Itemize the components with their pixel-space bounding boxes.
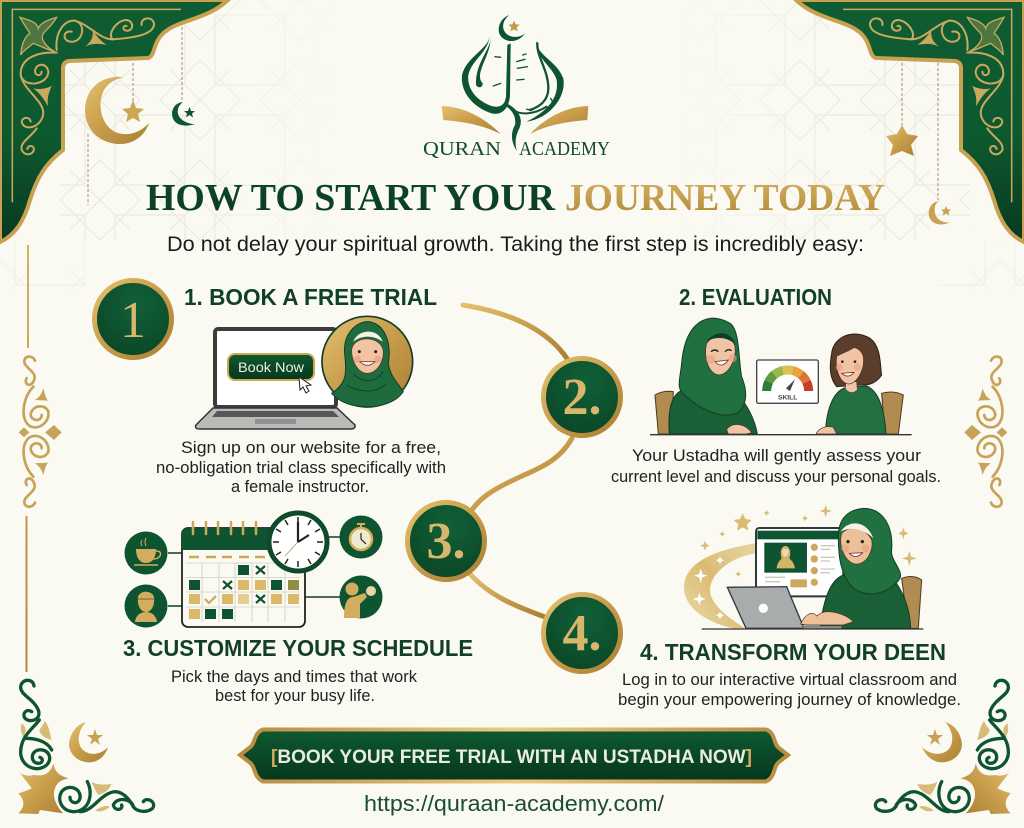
logo wordmark: ACADEMY	[519, 138, 610, 160]
bottom right corner ornament	[875, 680, 1011, 814]
title	[146, 177, 885, 219]
logo: Quran Academy	[423, 15, 610, 160]
icon: person with glasses	[124, 584, 168, 628]
description: step 4: Log in to our interactive virtual classroom and	[622, 671, 957, 689]
illustration: calendar and clock	[124, 513, 382, 628]
call to action banner: [BOOK YOUR FREE TRIAL WITH AN USTADHA NOW]	[271, 746, 752, 768]
top left corner ornament	[0, 0, 228, 242]
panel: step 1 book a free trial	[156, 284, 446, 496]
icon: laptop with book now button	[196, 329, 355, 429]
description: step 1: a female instructor.	[231, 478, 369, 496]
number medallion 1	[94, 280, 172, 358]
title: JOURNEY TODAY	[565, 177, 885, 219]
bottom left gold rule	[162, 804, 278, 806]
icon: coffee cup	[124, 532, 168, 574]
bottom left crescent	[69, 722, 108, 762]
heading: step 4: 4. TRANSFORM YOUR DEEN	[640, 639, 946, 665]
panel: step 3 customize your schedule	[123, 513, 473, 705]
panel: step 4 transform your deen	[618, 505, 961, 709]
icon: stopwatch	[340, 516, 382, 558]
heading: step 1: 1. BOOK A FREE TRIAL	[184, 284, 437, 310]
bottom left star	[87, 729, 103, 745]
number medallion 3: 3.	[426, 513, 466, 570]
description: step 3: best for your busy life.	[215, 687, 375, 705]
call to action banner	[240, 730, 788, 782]
hanging star and crescent, right	[886, 63, 951, 224]
description: step 4	[618, 671, 961, 709]
illustration: woman in virtual classroom	[684, 505, 923, 629]
bottom right crescent	[922, 722, 962, 762]
icon: laptop with book now button: Book Now	[238, 359, 305, 375]
logo calligraphy mark	[442, 15, 588, 151]
illustration: ustadha assessing student	[650, 318, 912, 435]
bottom left corner ornament	[18, 680, 154, 814]
heading: step 3: 3. CUSTOMIZE YOUR SCHEDULE	[123, 635, 473, 661]
number medallion 2	[544, 358, 620, 436]
top right corner ornament	[796, 0, 1024, 242]
number medallion 4	[544, 594, 620, 672]
bottom right gold rule	[707, 804, 866, 806]
number medallion 4: 4.	[562, 605, 602, 662]
description: step 1: no-obligation trial class specifically with	[156, 459, 446, 477]
number medallion 3	[408, 502, 484, 580]
bottom right star	[927, 729, 943, 745]
description: step 3	[171, 668, 418, 705]
icon: wall clock	[269, 513, 327, 571]
icon: instructor avatar	[322, 316, 413, 407]
description: step 2: Your Ustadha will gently assess your	[632, 447, 922, 465]
logo wordmark: QURAN	[423, 138, 501, 160]
connecting gold path	[463, 305, 572, 617]
left side ornament	[19, 245, 62, 672]
description: step 3: Pick the days and times that work	[171, 668, 418, 686]
number medallion 1: 1	[120, 292, 146, 349]
description: step 2: current level and discuss your personal goals.	[611, 468, 941, 486]
description: step 4: begin your empowering journey of knowledge.	[618, 691, 961, 709]
illustration: ustadha assessing student: SKILL	[778, 395, 797, 402]
logo wordmark	[423, 138, 610, 160]
description: step 1	[156, 439, 446, 496]
title: HOW TO START YOUR	[146, 177, 556, 219]
hanging crescent and stars, left	[85, 27, 195, 205]
description: step 2	[611, 447, 941, 486]
icon: person with flowers	[340, 576, 382, 618]
subtitle: Do not delay your spiritual growth. Taking the first step is incredibly easy:	[167, 233, 864, 256]
description: step 1: Sign up on our website for a free,	[181, 439, 441, 457]
number medallion 2: 2.	[562, 369, 602, 426]
panel: step 2 evaluation	[611, 284, 941, 486]
website url: https://quraan-academy.com/	[364, 791, 665, 816]
heading: step 2: 2. EVALUATION	[679, 284, 832, 310]
right side ornament	[964, 245, 1007, 668]
